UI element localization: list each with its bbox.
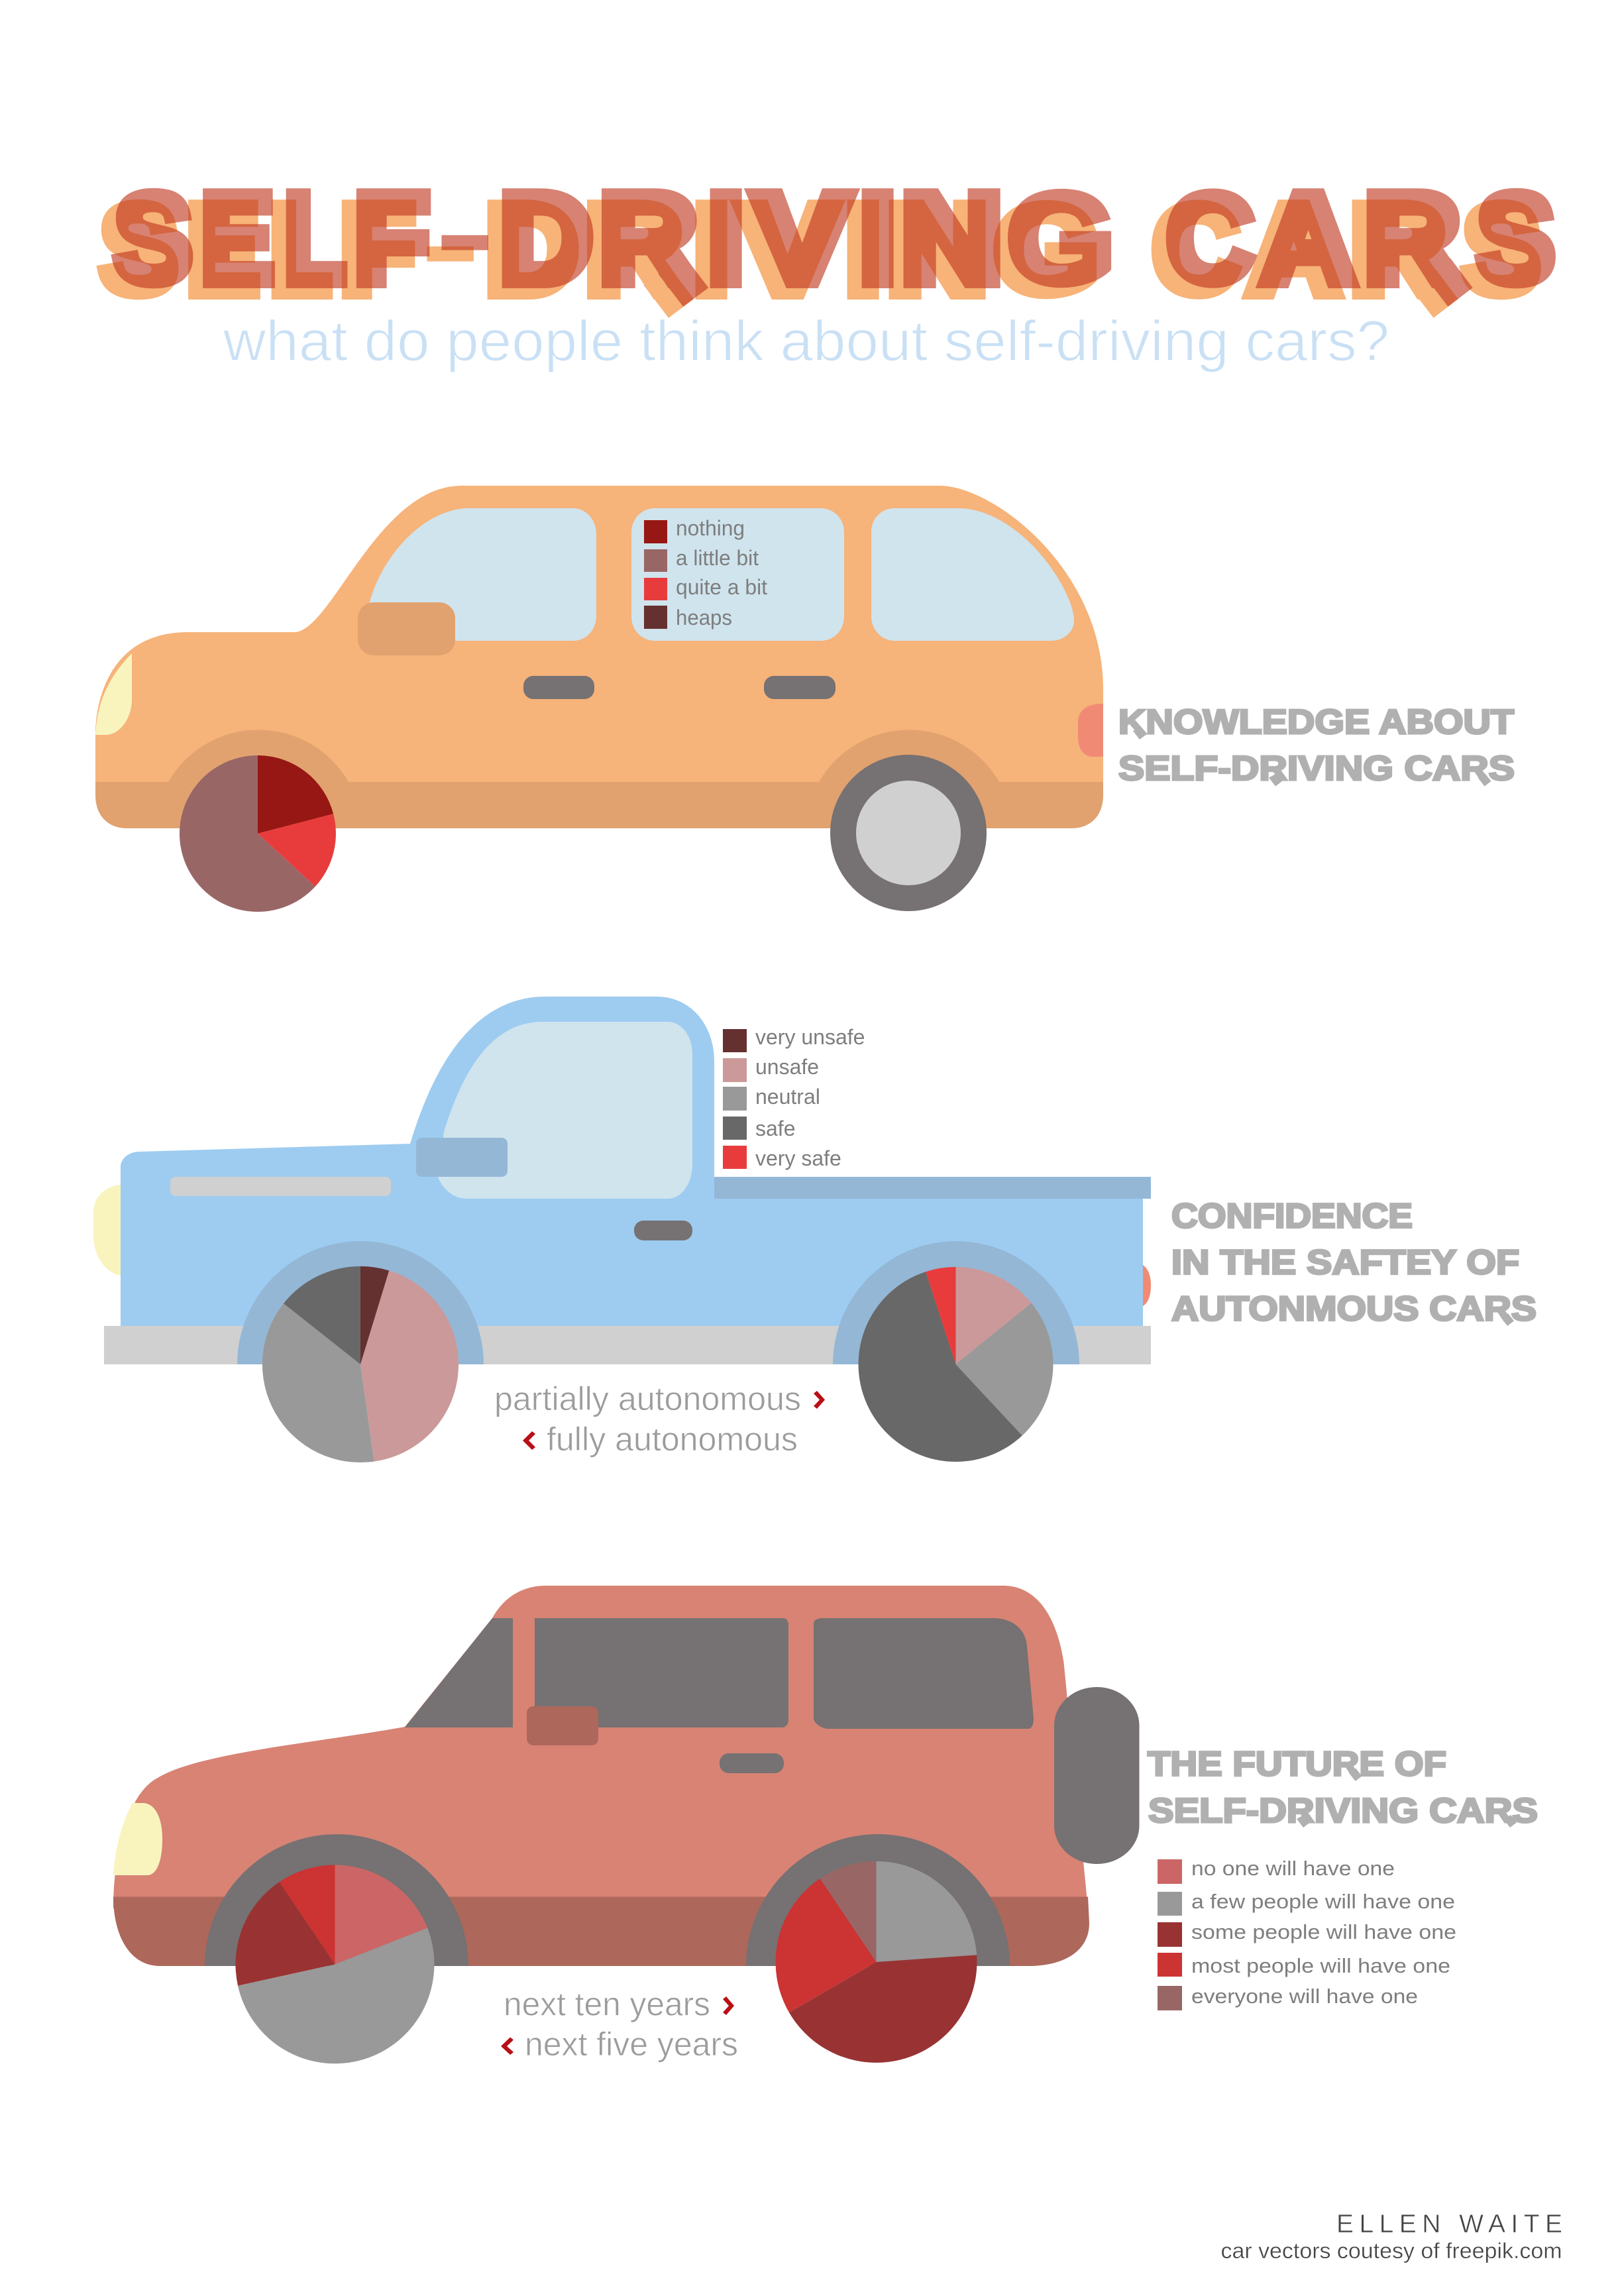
heading: knowledge: KNOWLEDGE ABOUT [1118,703,1514,741]
title red layer: S [114,168,192,309]
title orange layer: V [739,180,836,320]
title orange layer: I [694,180,729,320]
title orange layer: A [1247,180,1340,320]
title red layer: E [201,168,274,309]
footer credits [1220,2210,1562,2264]
cab window [438,1022,692,1199]
legend: future [1158,1857,1456,2010]
title orange layer [99,174,1540,320]
title red layer: G [1008,168,1114,309]
spare tyre [1054,1687,1140,1864]
pie chart: partially autonomous [262,1266,459,1462]
legend: heaps: heaps [676,606,732,629]
title red layer: V [754,168,850,309]
title red layer: L [285,168,345,309]
wheel arch front [168,730,349,782]
legend: quite a bit: quite a bit [676,575,767,599]
pie chart: next five years [235,1865,434,2063]
legend: a little bit [644,546,759,572]
suv bumper [113,1896,1089,1966]
title orange layer: C [1152,180,1240,320]
door handle rear [764,676,836,699]
subtitle: what do people think about self-driving cars? [223,309,1389,373]
headlight [93,1185,121,1276]
heading: future [1148,1745,1538,1830]
title [99,162,1555,320]
legend: nothing [644,516,745,543]
headlight [113,1803,162,1875]
truck bed rail [714,1177,1151,1199]
title orange layer: G [993,180,1100,320]
title red layer: N [901,168,1002,309]
title red layer: I [708,168,743,309]
title orange layer: D [486,180,578,320]
taillight [1078,704,1103,757]
legend: safety [723,1025,865,1170]
legend: some people: some people will have one [1191,1920,1456,1943]
windshield [405,1618,513,1727]
caption: next ten years: next ten years [504,1985,710,2022]
pie chart: next ten years [776,1861,977,2063]
title red layer: R [600,168,697,309]
legend: neutral [723,1085,820,1111]
title red layer: D [500,168,592,309]
wheel arch rear [819,730,999,782]
legend window [631,508,844,641]
heading: confidence: IN THE SAFTEY OF [1171,1243,1519,1282]
panel: orange van, knowledge [95,486,1103,912]
footer credits: ELLEN WAITE [1336,2210,1562,2238]
title orange layer: R [1350,180,1446,320]
title red layer: C [1166,168,1254,309]
title orange layer: E [187,180,259,320]
legend: a little bit: a little bit [676,546,759,570]
title orange layer: L [270,180,331,320]
title orange layer: I [845,180,881,320]
legend: a few people: a few people will have one [1191,1890,1455,1913]
title red layer: A [1262,168,1354,309]
title red layer: - [435,162,496,302]
title orange layer: S [1462,180,1540,320]
wheel arch front [205,1834,468,1966]
legend: everyone: everyone will have one [1191,1985,1418,2008]
legend: safe [723,1117,795,1140]
legend: unsafe: unsafe [755,1055,819,1079]
title orange layer: - [420,174,481,314]
rear window [814,1618,1034,1729]
heading: confidence [1171,1197,1537,1328]
taillight [1143,1265,1151,1306]
title orange layer: S [99,180,178,320]
door handle front [523,676,594,699]
caption: fully autonomous: fully autonomous [547,1421,798,1458]
heading: knowledge: SELF-DRIVING CARS [1118,749,1515,788]
legend: no one: no one will have one [1191,1857,1395,1880]
legend: no one [1158,1857,1395,1884]
title red layer: F [354,168,429,309]
title red layer: R [1365,168,1460,309]
side mirror [416,1138,508,1177]
title orange layer: R [585,180,682,320]
heading: confidence: AUTONMOUS CARS [1171,1289,1537,1328]
legend: safe: safe [755,1117,795,1140]
door handle [720,1753,784,1773]
side mirror [358,602,455,655]
van body [95,486,1103,795]
title red layer: S [1477,168,1555,309]
wheel arch front [237,1241,484,1364]
title orange layer: F [340,180,414,320]
legend: unsafe [723,1055,819,1082]
side mirror [527,1706,598,1745]
title red layer: I [860,168,895,309]
heading: knowledge [1118,703,1515,788]
side window [535,1618,788,1727]
caption: partially autonomous: partially autonomous [494,1380,801,1417]
legend: very unsafe [723,1025,865,1052]
suv body [113,1586,1088,1908]
legend: neutral: neutral [755,1085,820,1109]
panel: red suv, future [113,1586,1140,2063]
rear wheel [830,755,987,911]
legend: very unsafe: very unsafe [755,1025,865,1049]
van bumper [95,782,1103,828]
panel: blue pickup, confidence [93,997,1151,1462]
legend: most people: most people will have one [1191,1954,1450,1977]
wheel arch rear [833,1241,1079,1364]
pie chart: knowledge [180,755,336,912]
heading: confidence: CONFIDENCE [1171,1197,1413,1235]
title red layer [114,162,1555,309]
heading: future: SELF-DRIVING CARS [1148,1792,1538,1830]
hood strip [170,1177,391,1196]
wheel arch rear [746,1834,1010,1966]
headlight [95,653,132,735]
legend: heaps [644,606,732,629]
footer credits: car vectors coutesy of freepik.com [1220,2239,1562,2264]
pickup body [121,997,1143,1326]
caption: next five years: next five years [525,2026,738,2063]
legend: nothing: nothing [676,516,745,540]
grey sill [104,1326,1151,1364]
heading: future: THE FUTURE OF [1148,1745,1446,1783]
rear window [871,508,1074,641]
pie chart: fully autonomous [859,1267,1053,1462]
legend: very safe: very safe [755,1146,841,1170]
title orange layer: N [887,180,988,320]
door handle [634,1221,692,1240]
windshield window [358,508,596,641]
